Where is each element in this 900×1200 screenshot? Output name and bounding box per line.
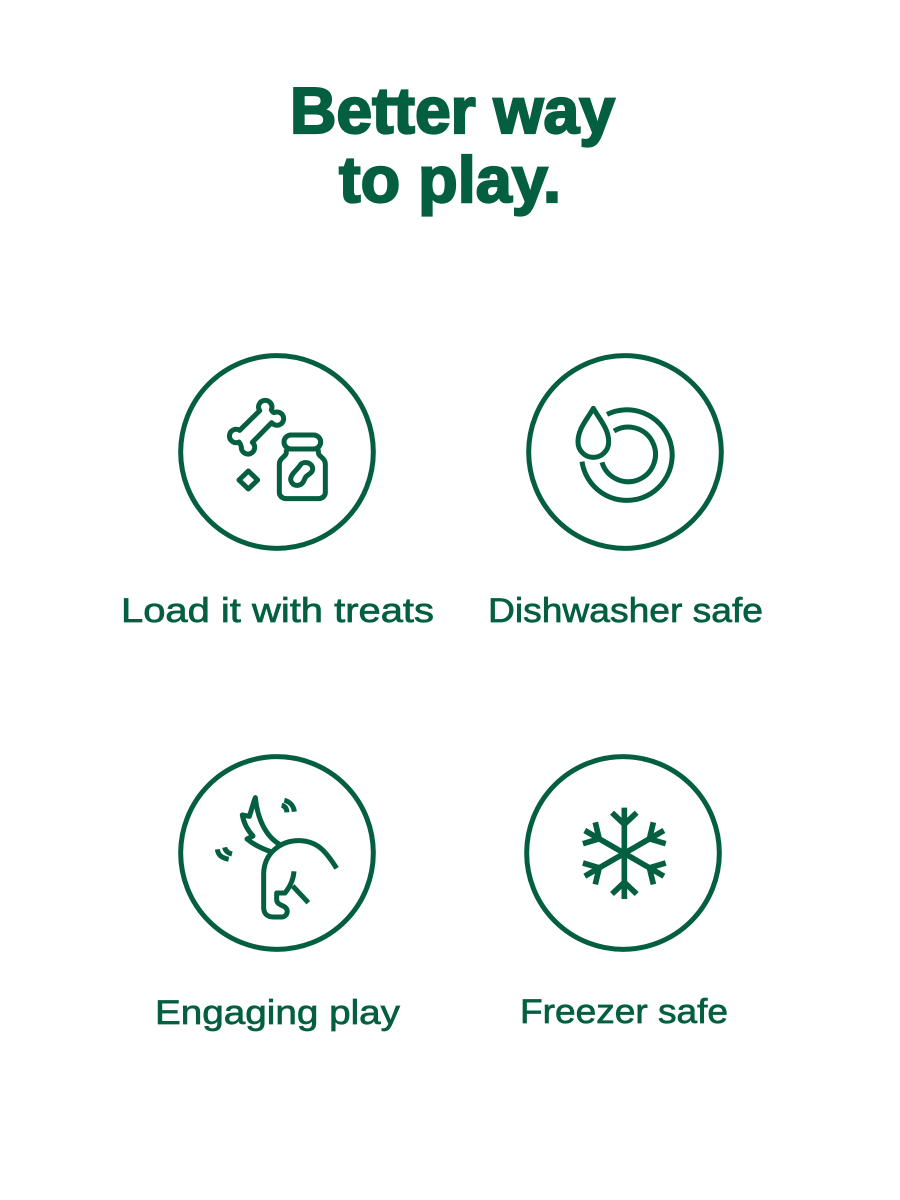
label: Load it with treats [121,592,434,630]
title [290,74,615,216]
label: Dishwasher safe [488,592,763,630]
title: to play. [339,143,561,216]
panel: dishwasher safe [488,356,763,630]
panel: freezer safe [520,757,728,1031]
icon: wagging dog tail [181,757,373,949]
icon: snowflake [527,757,719,949]
panel: load it with treats [121,356,434,630]
title: Better way [290,74,615,147]
icon: bone, jar and treat [181,356,373,548]
label: Freezer safe [520,993,728,1031]
label: Engaging play [155,994,400,1032]
panel: engaging play [155,757,400,1032]
icon: water drop and plate [529,356,721,548]
